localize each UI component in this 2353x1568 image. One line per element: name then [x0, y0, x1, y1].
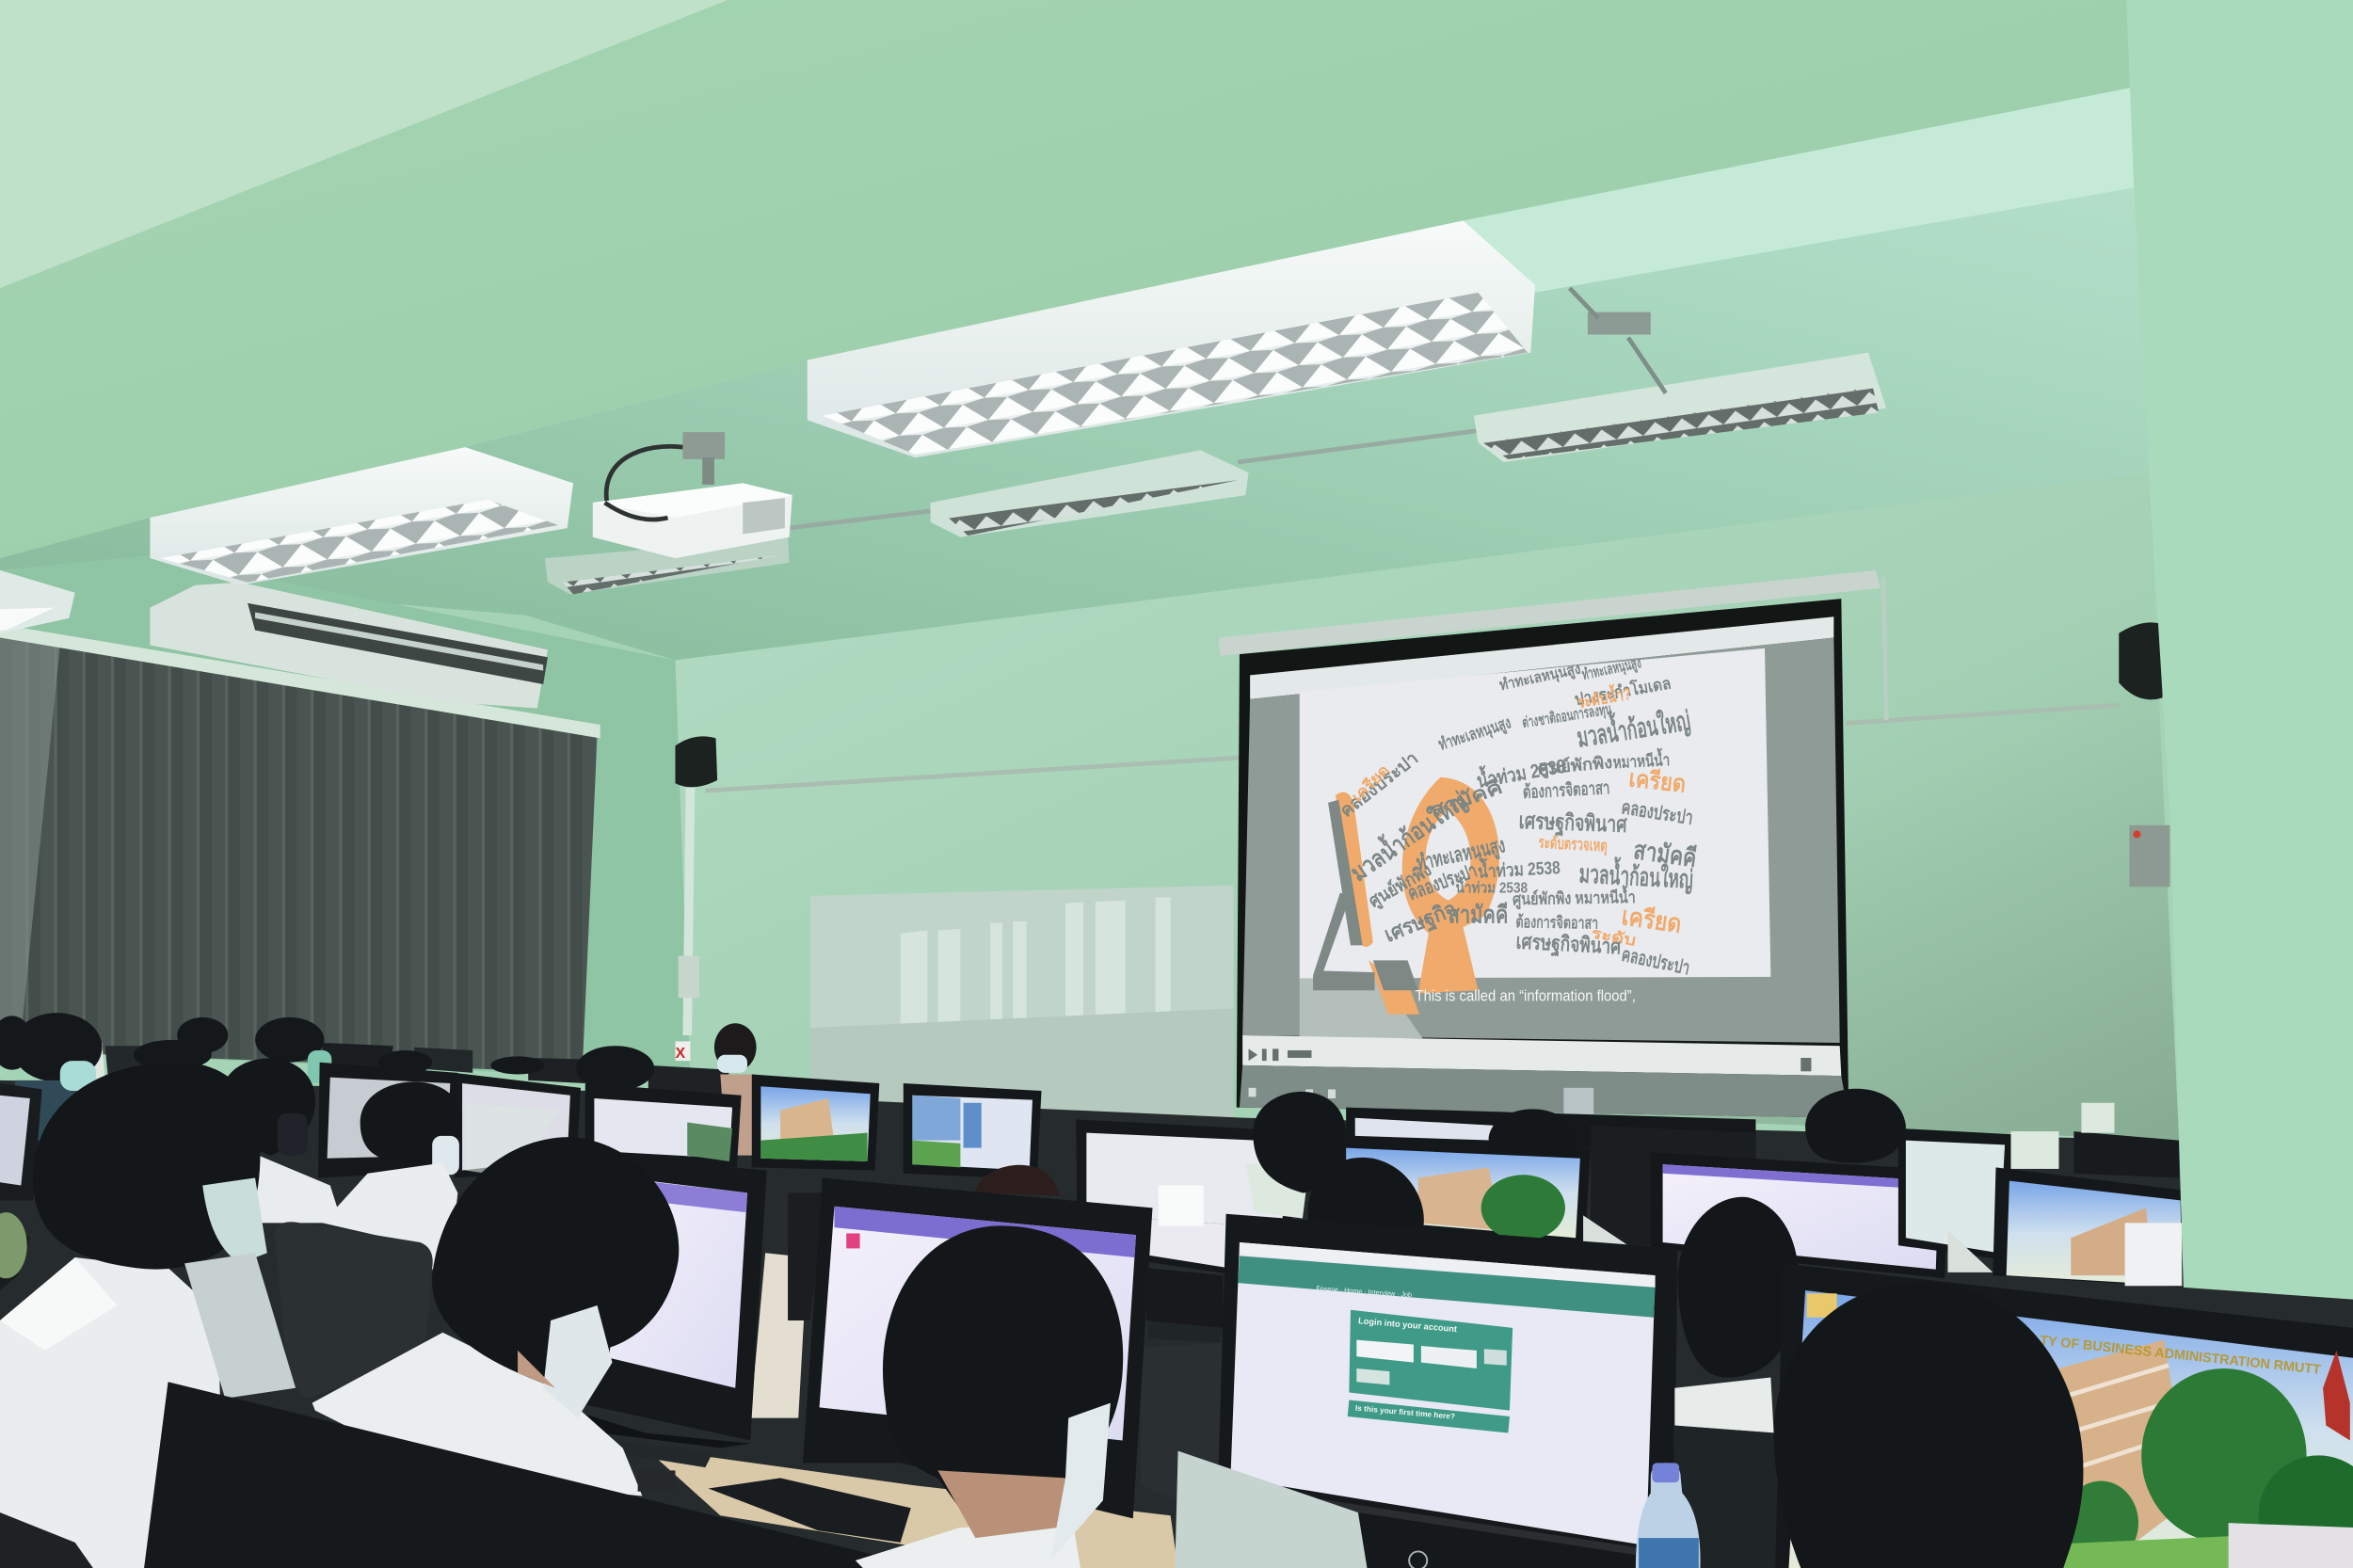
login page header	[1238, 1256, 1656, 1318]
desk right of centre monitor	[750, 1192, 825, 1418]
word cloud: มวลน้ำก้อนใหญ่	[1578, 854, 1694, 895]
word cloud: เศรษฐกิจ	[1381, 897, 1460, 949]
word cloud: ทำทะเลหนุนสูง	[1436, 712, 1513, 756]
monitor: row 2 first	[318, 1063, 457, 1177]
word cloud: ศูนย์พักพิง หมาหนีน้ำ	[1513, 885, 1636, 910]
ceiling light: below projector	[545, 537, 790, 594]
word cloud: เครียด	[1620, 901, 1684, 938]
wallpaper heading: FACULTY OF BUSINESS ADMINISTRATION RMUTT	[1995, 1329, 2322, 1378]
word cloud: น้ำท่วม 2538	[1474, 751, 1568, 792]
monitor: centre with purple page	[803, 1177, 1223, 1518]
ceiling light: far left	[0, 570, 75, 633]
far row: monitors and students: X	[675, 1046, 685, 1062]
monitor: large white	[1076, 1119, 1300, 1283]
paper note in foreground	[1175, 1451, 1367, 1568]
word cloud: ทำทะเลหนุนสูง	[1497, 660, 1582, 696]
monitor: faculty wallpaper	[1775, 1263, 2353, 1568]
student: small girl	[975, 1165, 1060, 1196]
monitor: desktop wallpaper	[1993, 1167, 2184, 1288]
student: back right 1	[1489, 1109, 1576, 1156]
word cloud: ศูนย์พักพิง	[1365, 858, 1435, 913]
student: back centre	[1253, 1092, 1346, 1192]
word cloud: ทำทะเลหนุนสูง	[1580, 654, 1643, 685]
word cloud: สามัคคี	[1632, 835, 1698, 872]
word cloud: มวลน้ำก้อนใหญ่	[1343, 783, 1472, 887]
chair	[275, 1222, 433, 1399]
word cloud: ทำทะเลหนุนสูง	[1415, 833, 1508, 877]
student: shoulders centre	[1583, 1215, 1628, 1245]
wallpaper crest	[2323, 1351, 2350, 1440]
word cloud: ต่างชาติถอนการลงทุน	[1521, 700, 1613, 732]
monitor: row 2 third	[585, 1083, 742, 1167]
word cloud: น้ำท่วม 2538	[1456, 876, 1528, 897]
HP logo	[1409, 1551, 1427, 1568]
word cloud	[1337, 654, 1698, 979]
word cloud: มวลน้ำก้อนใหญ่	[1574, 700, 1692, 755]
speaker: left	[675, 736, 717, 787]
lower left plant and bottle	[0, 1212, 27, 1278]
monitor icon	[1313, 800, 1418, 990]
word cloud: ปางระกำโมเดล	[1573, 673, 1673, 709]
monitor: building wallpaper	[752, 1074, 879, 1171]
window title bar	[1250, 616, 1833, 699]
instructor	[714, 1023, 757, 1071]
ceiling light: right	[1474, 353, 1886, 462]
speaker: right	[2119, 622, 2163, 699]
back row paper notes	[465, 1103, 2114, 1219]
far row: students	[0, 1013, 654, 1141]
student behind login monitor	[1673, 1197, 1799, 1568]
wallpaper trees	[2141, 1368, 2307, 1543]
word cloud: เครียด	[1348, 761, 1393, 806]
lower room dark fill	[0, 1080, 2353, 1568]
whiteboard	[810, 886, 1234, 1118]
word cloud: เครียด	[1627, 765, 1688, 798]
video background	[1242, 638, 1840, 1043]
projector	[593, 432, 792, 558]
desktop icon	[1807, 1293, 1837, 1318]
projector screen	[1219, 570, 1881, 1118]
player controls	[1242, 1035, 1841, 1076]
word cloud: คลองประปา	[1337, 748, 1422, 822]
slide	[1300, 648, 1770, 978]
word cloud: ต้องการจิตอาสา	[1522, 777, 1610, 803]
ceiling sensor	[1570, 288, 1666, 393]
login form: Is this your first time here?	[1355, 1403, 1455, 1421]
word cloud: คลองประปา	[1620, 944, 1691, 979]
right column	[2126, 0, 2353, 1300]
left cluster students	[222, 1059, 462, 1298]
student: mask row 2	[222, 1059, 315, 1156]
orange figure	[1336, 777, 1499, 1015]
monitor: middle back black	[1346, 1108, 1755, 1152]
window blinds	[0, 624, 600, 1073]
word cloud: สามัคคี	[1427, 776, 1505, 823]
word cloud: หมาหนีน้ำ	[1612, 747, 1671, 772]
subtitle: This is called an “information flood”,	[1416, 986, 1636, 1004]
monitor: login phone wallpaper	[904, 1083, 1042, 1179]
monitor: far right back	[1898, 1128, 2014, 1260]
student: row 2 second	[360, 1081, 462, 1163]
back wall conduit	[687, 431, 2119, 1035]
ceiling light: middle	[931, 450, 1249, 537]
main desk and keyboard	[616, 1320, 1223, 1568]
word cloud: คลองประปา	[1620, 796, 1694, 829]
wallpaper building	[2059, 1340, 2191, 1568]
word cloud: ศูนย์พักพิง	[1537, 752, 1613, 780]
ceiling light: left	[150, 447, 573, 585]
word cloud: ระดับตรวจเหตุ	[1538, 833, 1608, 856]
word cloud: คลองประปา	[1405, 859, 1480, 904]
front centre student	[856, 1225, 1123, 1568]
monitor: purple page	[1651, 1152, 1949, 1278]
far row: monitors and students	[87, 1023, 762, 1156]
middle students	[975, 1089, 1993, 1272]
student: back right 2	[1805, 1089, 1906, 1163]
word cloud: น้ำท่วม 2538	[1477, 854, 1561, 883]
login form: Login into your account	[1358, 1316, 1457, 1334]
word cloud: เศรษฐกิจพินาศ	[1518, 808, 1628, 840]
wall outlet	[679, 956, 699, 998]
monitor: login page: Fosese · Home · Interview · Job	[1316, 1285, 1412, 1299]
screen housing	[1219, 570, 1881, 656]
word cloud: เศรษฐกิจพินาศ	[1515, 930, 1622, 960]
air conditioner	[150, 583, 548, 708]
word cloud: ระดับน้ำ?	[1576, 681, 1633, 712]
screen frame	[1237, 599, 1849, 1118]
login form	[1348, 1310, 1513, 1433]
monitor: login page	[1215, 1214, 1678, 1568]
water bottle	[1636, 1463, 1701, 1568]
monitor: wallpaper centre	[1336, 1136, 1591, 1245]
front right student head	[1773, 1283, 2083, 1568]
back row monitors	[0, 1063, 2184, 1288]
wallpaper lawn	[2025, 1530, 2353, 1568]
monitor: mid left with student page	[573, 1156, 767, 1448]
student: woman at monitor	[1308, 1158, 1424, 1230]
word cloud: ระดับ	[1590, 925, 1638, 950]
student with white mask	[312, 1137, 679, 1496]
left student	[0, 1062, 296, 1568]
taskbar	[1240, 1065, 1849, 1118]
word cloud: ต้องการจิตอาสา	[1515, 912, 1598, 933]
monitor: left edge	[0, 1083, 42, 1200]
alarm box	[2129, 825, 2169, 887]
word cloud: สามัคคี	[1449, 901, 1508, 928]
ceiling light: large centre	[808, 220, 1535, 457]
front black monitor back	[0, 1382, 916, 1568]
monitor: row 2 second	[455, 1073, 581, 1177]
